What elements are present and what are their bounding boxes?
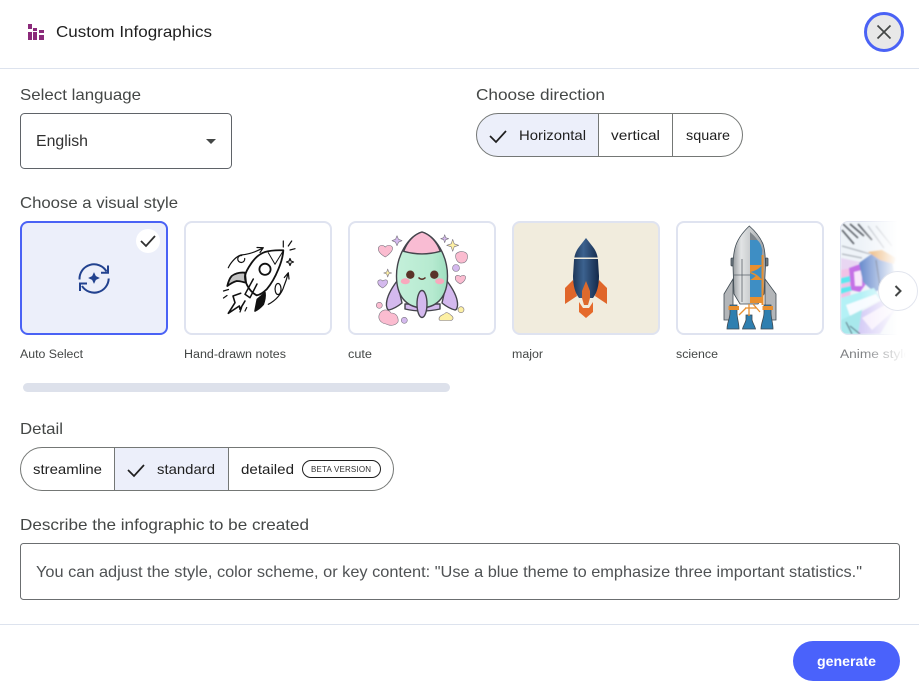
segmented control: direction: Horizontal <box>519 127 586 143</box>
dropdown <box>20 114 232 168</box>
panel: direction <box>476 87 742 157</box>
icon: hand-drawn rocket <box>224 241 295 313</box>
segmented control: direction: square <box>686 127 730 143</box>
segmented control: detail <box>20 447 394 491</box>
segmented control: detail: detailed <box>241 461 294 477</box>
icon: auto select <box>79 264 109 293</box>
heading: choose a visual style: Choose a visual style <box>20 195 178 212</box>
card: major: major <box>512 349 543 361</box>
badge: beta version: BETA VERSION <box>311 465 371 474</box>
text input: You can adjust the style, color scheme, or key content: "Use a blue theme to emphasize three important statistics." <box>36 564 862 581</box>
card: hand-drawn notes <box>184 222 331 361</box>
icon: infographics logo <box>28 24 44 40</box>
heading: select language: Select language <box>20 87 141 104</box>
scrollbar <box>23 383 450 392</box>
icon: next arrow button <box>878 272 918 310</box>
panel: detail <box>20 421 394 491</box>
segmented control: detail: streamline <box>33 461 102 477</box>
icon: close button <box>866 14 902 50</box>
icon: cute rocket <box>376 232 467 325</box>
card: cute <box>348 222 495 361</box>
badge: beta version <box>302 460 380 478</box>
generate button: generate <box>817 653 876 669</box>
card: cute: cute <box>348 349 372 361</box>
header bar <box>28 14 902 50</box>
heading: choose direction: Choose direction <box>476 87 605 104</box>
heading: detail: Detail <box>20 421 63 438</box>
icon: science rocket <box>724 226 776 329</box>
panel: language select <box>20 87 232 168</box>
panel: description <box>20 517 900 600</box>
segmented control: detail: standard <box>157 461 215 477</box>
title: Custom Infographics <box>56 24 212 41</box>
card: anime style: Anime style <box>840 349 911 361</box>
card: major <box>512 222 659 361</box>
segmented control: direction <box>476 113 742 157</box>
card: hand-drawn notes: Hand-drawn notes <box>184 349 286 361</box>
card: anime style <box>840 221 902 360</box>
dropdown: English <box>36 133 88 150</box>
card: science: science <box>676 349 718 361</box>
heading: describe the infographic: Describe the infographic to be created <box>20 517 309 534</box>
icon: major rocket <box>565 238 607 318</box>
card: auto select <box>20 222 167 361</box>
text input <box>20 544 900 600</box>
card: science <box>676 222 823 361</box>
card: auto select: Auto Select <box>20 349 84 361</box>
segmented control: direction: vertical <box>611 127 660 143</box>
panel: visual style <box>20 195 919 392</box>
generate button <box>793 641 900 681</box>
